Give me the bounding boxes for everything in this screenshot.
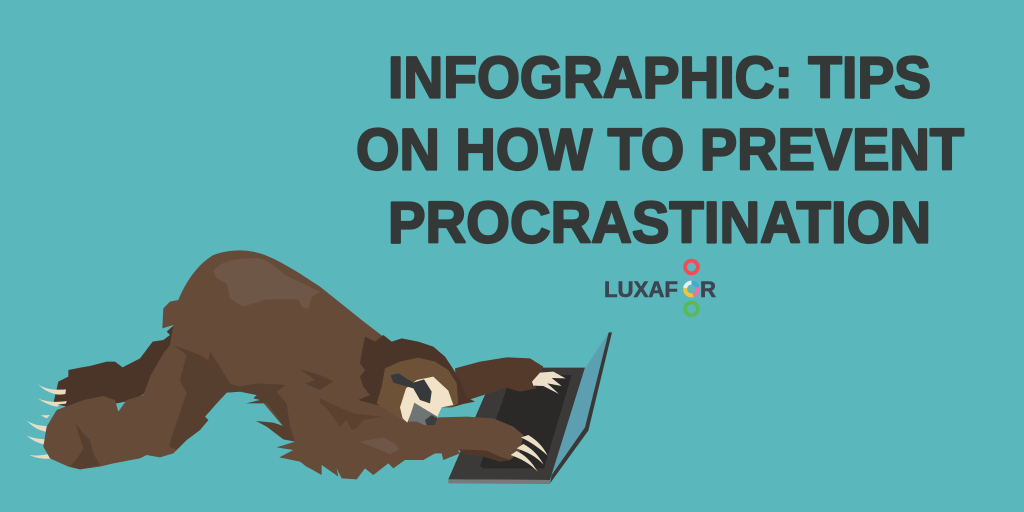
body and rear leg <box>43 250 460 479</box>
title <box>356 46 964 256</box>
head dark fur <box>358 335 475 407</box>
laptop base <box>448 368 585 480</box>
laptop front edge <box>448 479 550 484</box>
back highlight <box>213 258 320 309</box>
title: ON HOW TO PREVENT <box>356 118 964 182</box>
title: PROCRASTINATION <box>388 190 931 256</box>
laptop screen <box>552 333 609 475</box>
face fur <box>377 358 458 422</box>
Luxafor logo: LUXAF <box>604 277 678 302</box>
Luxafor logo <box>604 261 716 315</box>
keyboard <box>480 375 572 468</box>
muzzle <box>408 403 437 425</box>
far arm <box>455 357 543 405</box>
near arm <box>403 417 523 462</box>
far claws <box>532 372 566 394</box>
leg and belly shadow <box>169 345 295 450</box>
Luxafor logo: R <box>700 277 716 302</box>
eye mask <box>391 373 432 403</box>
chest fur shadow <box>320 398 382 430</box>
foot shadow <box>70 423 100 469</box>
cream face <box>400 377 453 423</box>
side fur tuft <box>300 369 333 390</box>
title: INFOGRAPHIC: TIPS <box>388 46 931 110</box>
near claws <box>511 435 548 472</box>
laptop <box>448 332 612 484</box>
nose <box>425 415 437 425</box>
sloth <box>27 250 566 479</box>
chest patch <box>359 437 399 454</box>
rear foot dark fur <box>53 325 187 407</box>
laptop screen edge <box>550 332 612 483</box>
arm shadow <box>458 449 510 462</box>
rear claws <box>27 384 67 459</box>
